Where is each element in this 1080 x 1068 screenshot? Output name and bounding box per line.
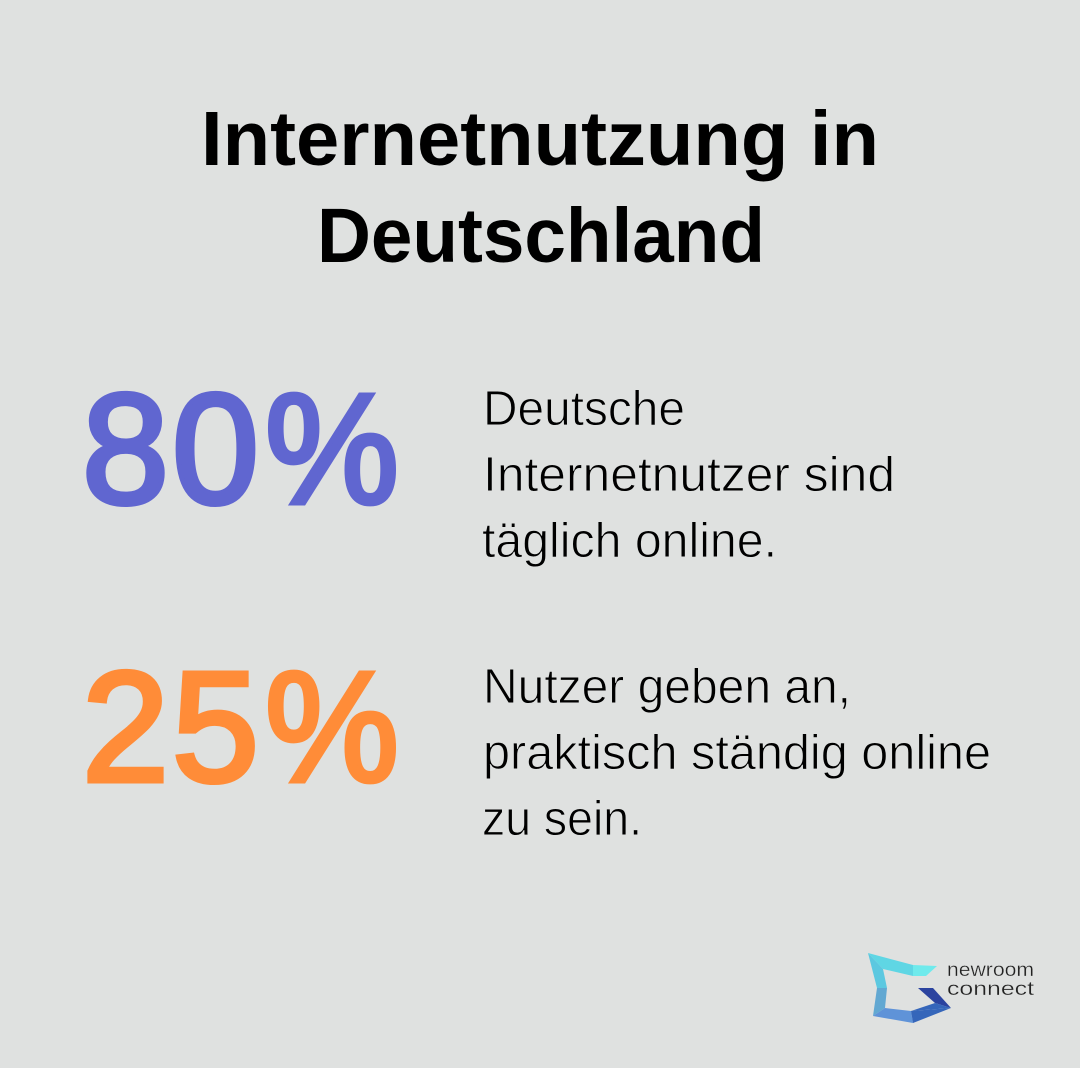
title: Internetnutzung in — [201, 96, 879, 182]
stat: 80%: % — [265, 362, 399, 537]
text: constantly online: praktisch ständig online — [483, 726, 991, 780]
stat: 80% — [82, 362, 399, 537]
text: constantly online — [482, 660, 991, 846]
title — [201, 96, 879, 279]
stat: 25%: % — [265, 640, 399, 815]
text: daily online — [482, 382, 895, 568]
text: constantly online: Nutzer geben an, — [483, 660, 851, 714]
logo wordmark: connect — [947, 979, 1035, 1000]
stat: 25%: 5 — [172, 640, 259, 815]
title: Deutschland — [317, 193, 765, 279]
logo: newroom connect — [868, 953, 1035, 1023]
stat: 25% — [82, 640, 399, 815]
stat: 80%: 0 — [172, 362, 259, 537]
text: constantly online: zu sein. — [482, 792, 642, 846]
text: daily online: Internetnutzer sind — [483, 448, 895, 502]
logo wordmark — [947, 960, 1035, 1000]
text: daily online: Deutsche — [483, 382, 685, 436]
text: daily online: täglich online. — [482, 514, 777, 568]
stat: 80%: 8 — [82, 362, 169, 537]
icon: logo mark — [868, 953, 951, 1023]
logo wordmark: newroom — [947, 960, 1034, 981]
stat: 25%: 2 — [82, 640, 169, 815]
